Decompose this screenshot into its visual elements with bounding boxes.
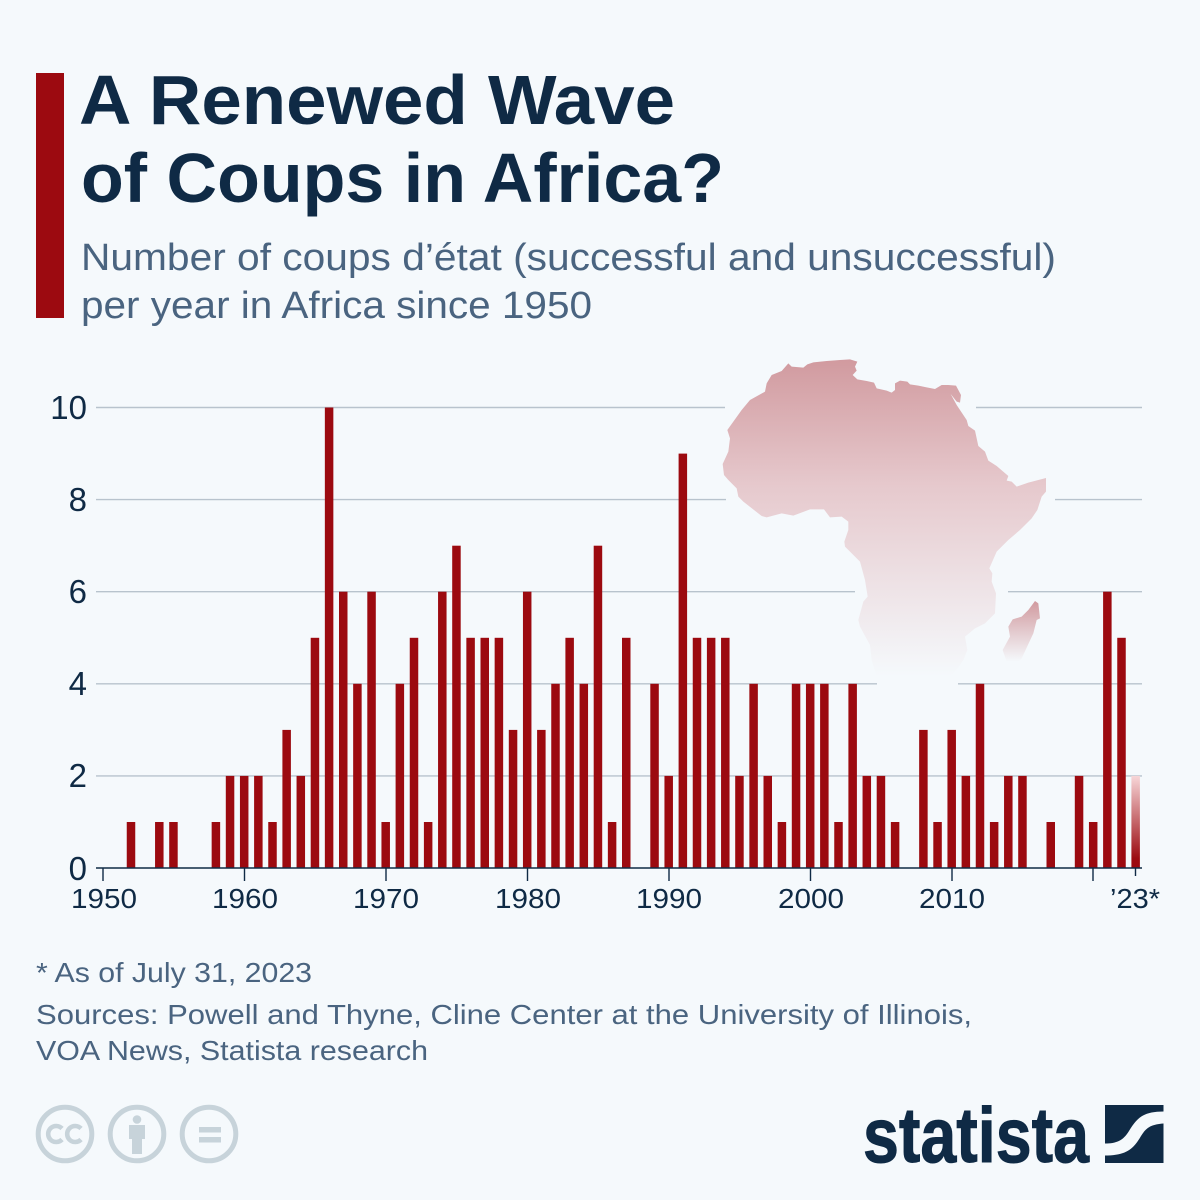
sources: VOA News, Statista research — [36, 1035, 428, 1066]
x-axis line and ticks — [96, 868, 1142, 881]
x-axis labels: ’23* — [1110, 883, 1160, 914]
subtitle — [81, 237, 1056, 327]
x-axis labels: 2010 — [919, 883, 985, 914]
bars: coups per year 1952-2022 — [127, 408, 1126, 868]
sources: Sources: Powell and Thyne, Cline Center at the University of Illinois, — [36, 999, 972, 1030]
y-axis labels: 6 — [69, 573, 87, 610]
y-axis labels: 10 — [50, 389, 87, 426]
subtitle: Number of coups d’état (successful and unsuccessful) — [81, 237, 1056, 279]
title — [79, 61, 724, 217]
icon: no derivatives — [182, 1107, 236, 1161]
y-axis labels: 2 — [69, 757, 87, 794]
x-axis labels: 1990 — [636, 883, 702, 914]
chart — [50, 359, 1160, 914]
footnote: * As of July 31, 2023 — [36, 957, 312, 988]
x-axis labels — [71, 883, 1160, 914]
x-axis labels: 1960 — [212, 883, 278, 914]
subtitle: per year in Africa since 1950 — [81, 285, 592, 327]
icon: statista logo mark — [1105, 1105, 1164, 1163]
icon: creative commons — [38, 1107, 92, 1161]
y-axis labels: 8 — [69, 481, 87, 518]
x-axis labels: 1980 — [495, 883, 561, 914]
y-axis labels: 4 — [69, 665, 87, 702]
accent bar — [36, 73, 64, 318]
y-axis labels: 0 — [69, 850, 87, 887]
x-axis labels: 1950 — [71, 883, 137, 914]
statista wordmark: statista — [863, 1091, 1090, 1179]
y-axis labels — [50, 389, 87, 887]
icon: attribution — [110, 1107, 164, 1161]
title: A Renewed Wave — [79, 61, 675, 139]
title: of Coups in Africa? — [81, 139, 724, 217]
x-axis labels: 2000 — [778, 883, 844, 914]
x-axis labels: 1970 — [353, 883, 419, 914]
sources — [36, 999, 972, 1066]
map: Africa silhouette — [723, 359, 1046, 677]
bar: 2023 partial year — [1131, 776, 1140, 868]
